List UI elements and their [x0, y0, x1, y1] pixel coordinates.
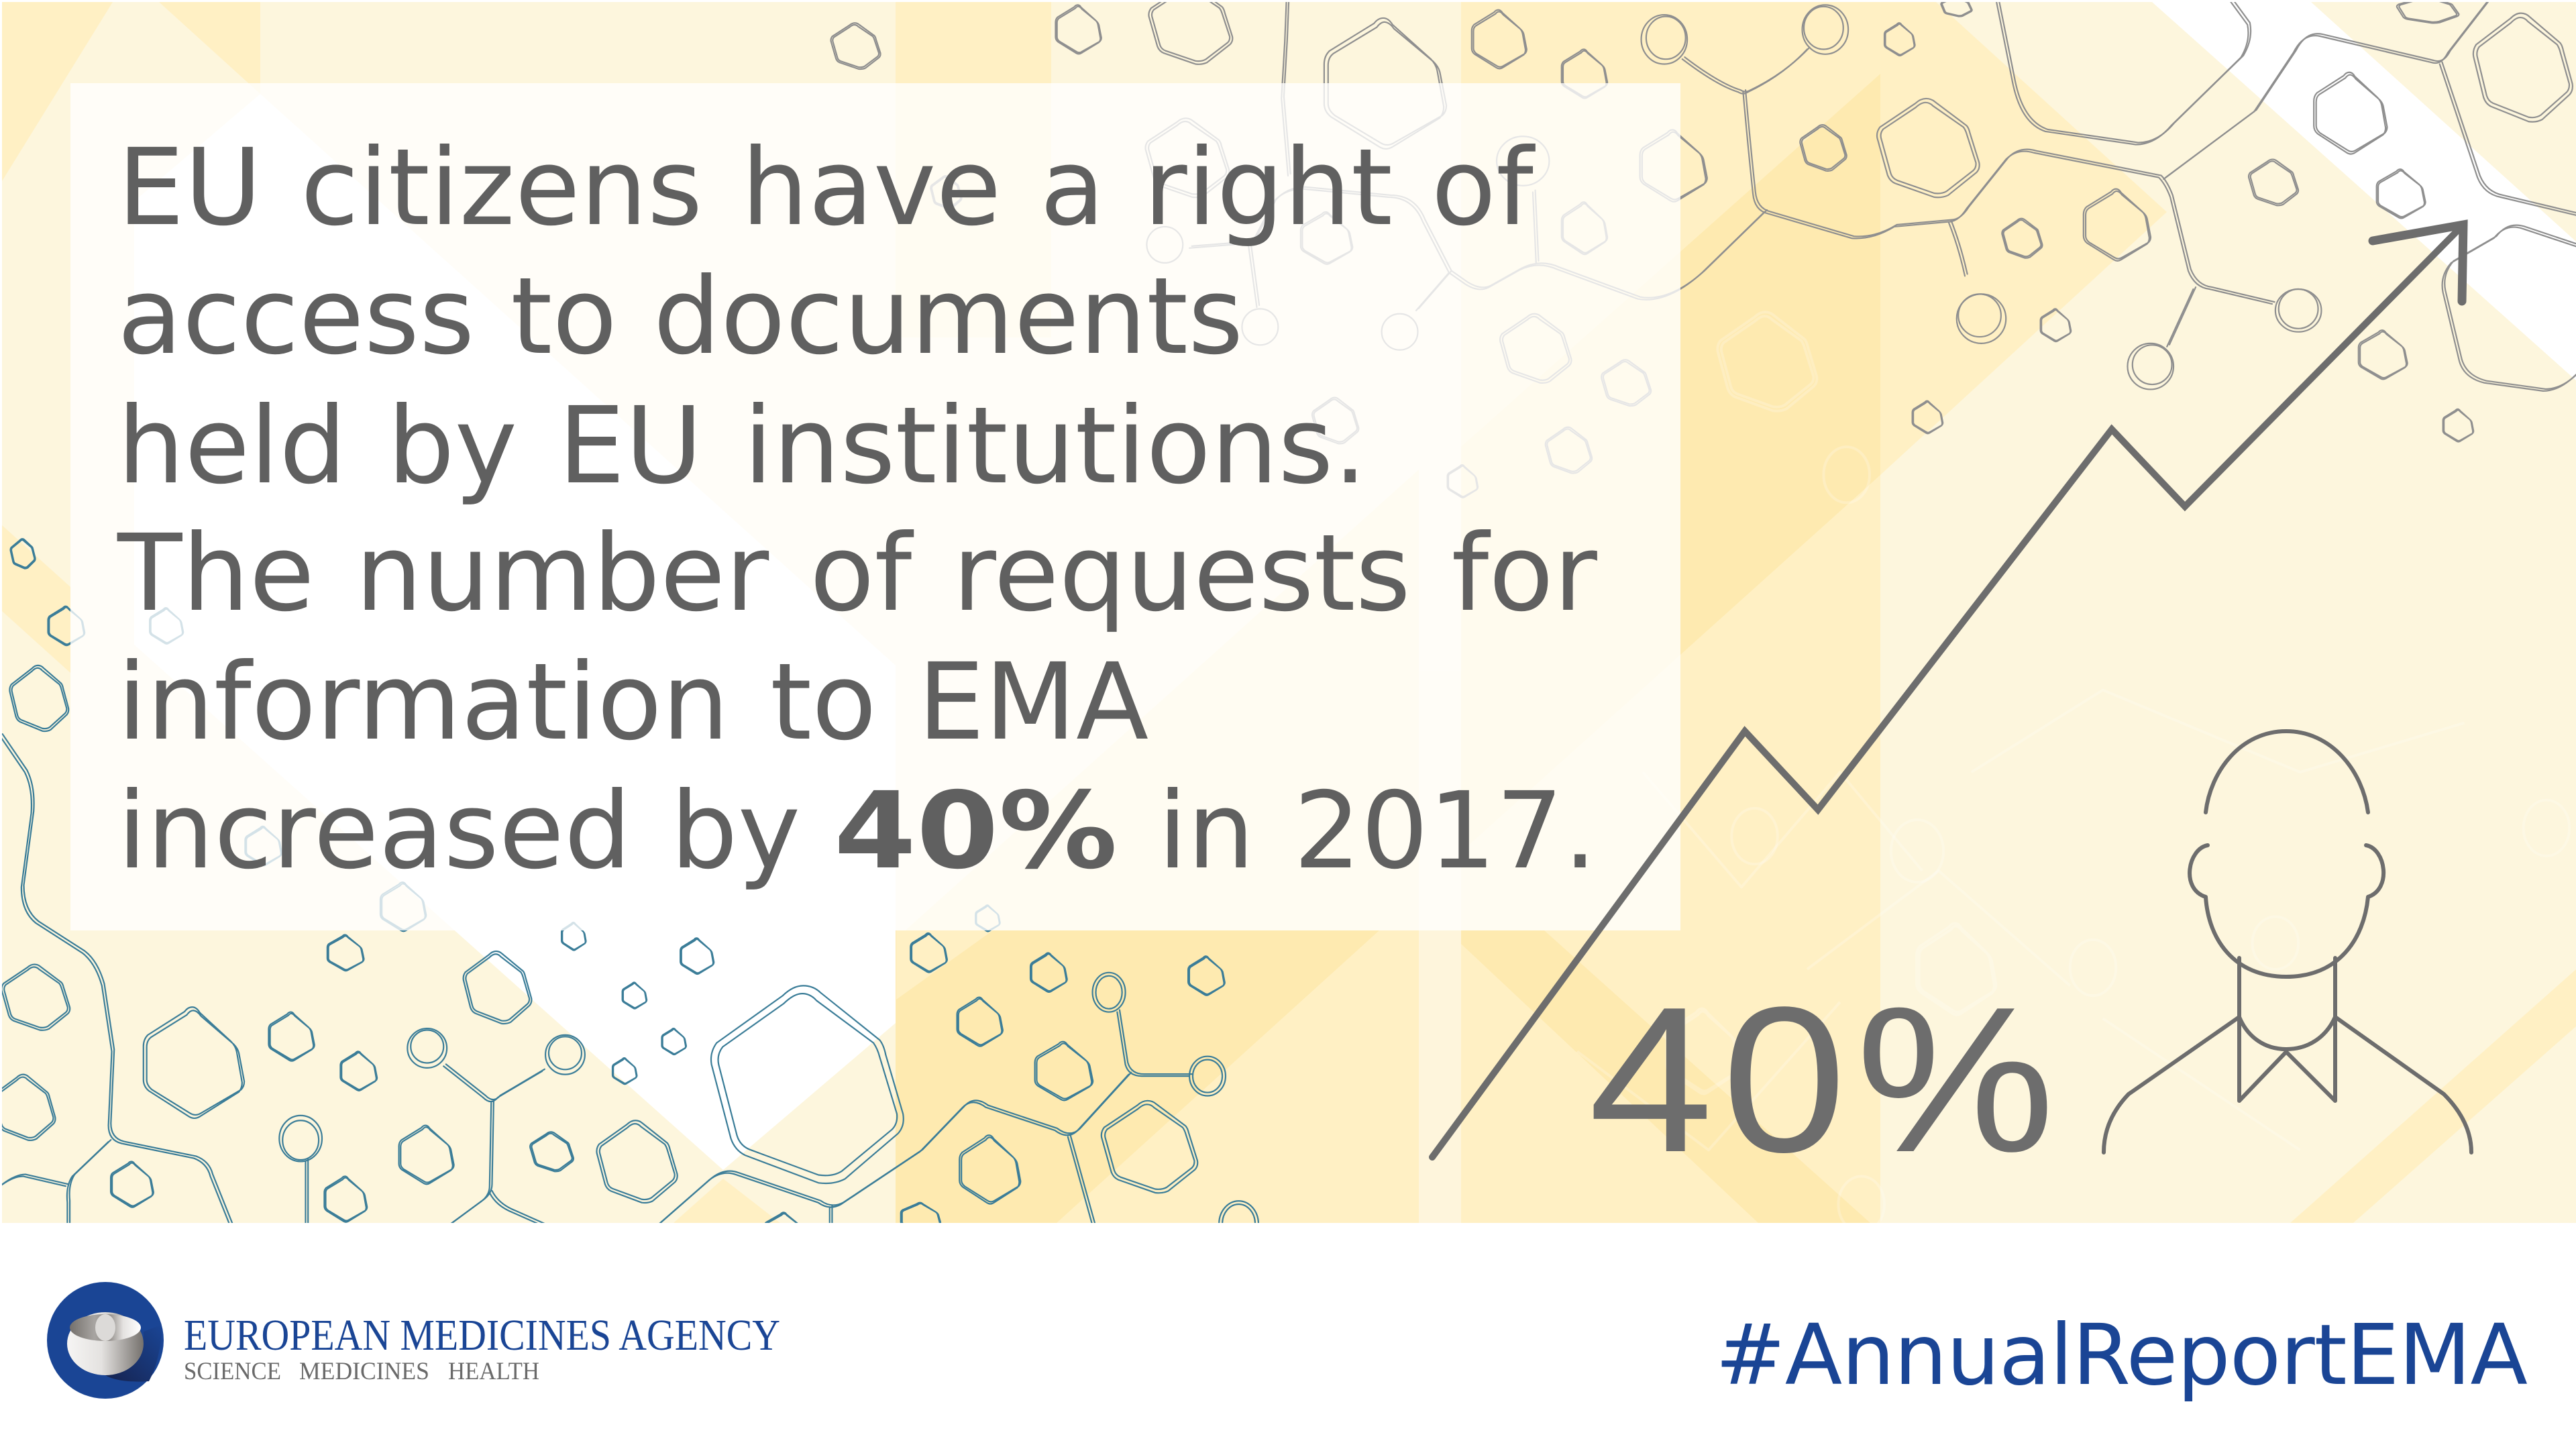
40 percent figure: 40%	[1589, 964, 2055, 1195]
main statement text: information to EMA	[117, 641, 1148, 764]
main statement text: held by EU institutions.	[117, 384, 1367, 508]
rising arrow chart	[1432, 225, 2463, 1157]
main statement text: 40%	[834, 769, 1118, 893]
main statement text: in 2017.	[1158, 769, 1597, 893]
agency tagline: SCIENCE	[184, 1358, 281, 1385]
teal molecules lower left	[0, 539, 1258, 1252]
main statement text: access to documents	[117, 255, 1243, 378]
icon: logo emblem	[47, 1282, 164, 1399]
hashtag: #AnnualReportEMA	[1715, 1307, 2527, 1404]
main statement text	[117, 126, 1597, 893]
agency tagline: HEALTH	[448, 1358, 539, 1385]
main statement text: increased by	[117, 769, 800, 893]
translucent text panel	[70, 83, 1680, 930]
main statement text: The number of requests for	[117, 512, 1597, 635]
agency tagline	[184, 1358, 539, 1385]
icon: person outline	[2104, 731, 2471, 1152]
agency tagline: MEDICINES	[299, 1358, 429, 1385]
agency name: EUROPEAN MEDICINES AGENCY	[184, 1311, 780, 1360]
main statement text: EU citizens have a right of	[117, 126, 1536, 250]
grey molecules upper right	[831, 0, 2576, 498]
footer: EMA logo	[47, 1282, 780, 1399]
faint background molecules	[1577, 312, 2569, 1232]
